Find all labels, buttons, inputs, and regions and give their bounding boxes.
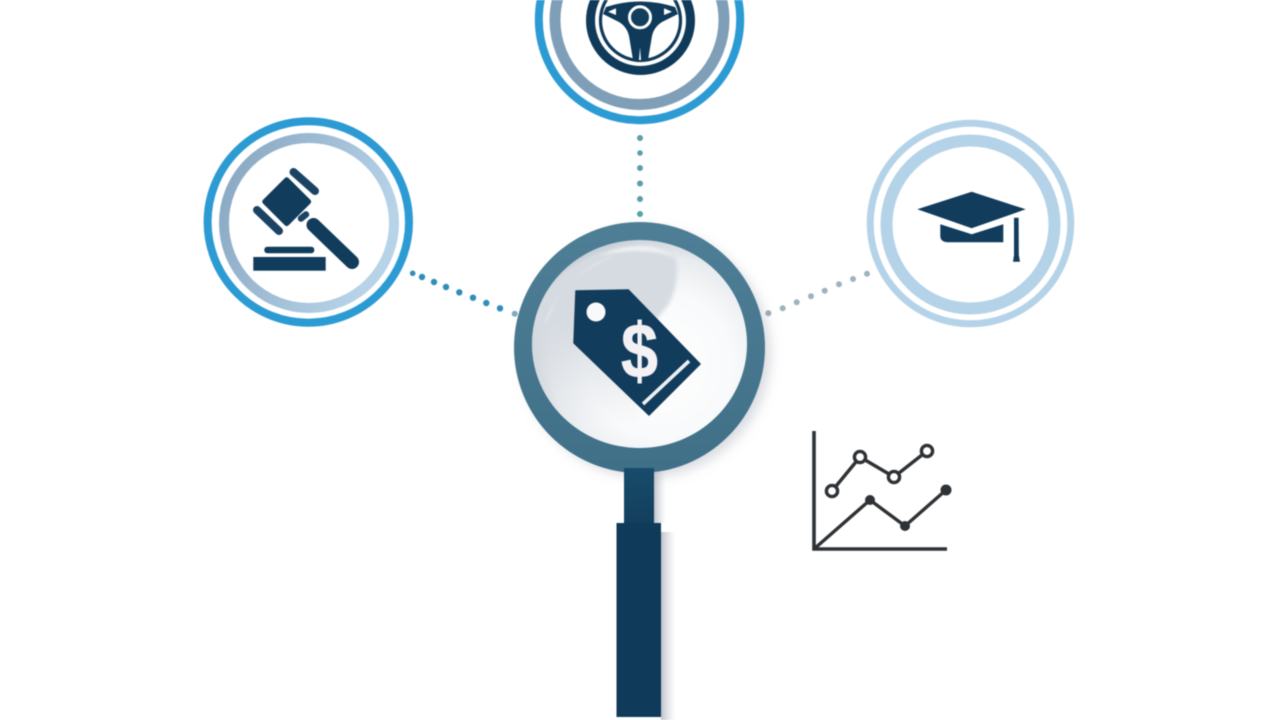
lens drop shadow (522, 229, 770, 477)
axes (814, 431, 947, 549)
left badge: gavel (208, 121, 409, 323)
icon: price tag: $ (621, 308, 658, 395)
left connector dots (410, 270, 518, 317)
lens ring (514, 222, 765, 473)
lower series (814, 484, 952, 549)
icon: price tag (574, 290, 700, 415)
handle shadow (661, 532, 676, 720)
top connector dots (637, 135, 643, 217)
right badge: graduation cap (870, 123, 1071, 324)
icon: gavel (253, 172, 352, 271)
lens reflections (532, 246, 678, 400)
right connector dots (765, 271, 870, 316)
infographic (202, 0, 1075, 720)
magnifying glass (514, 222, 770, 720)
icon: steering wheel (590, 0, 690, 70)
line chart icon (814, 431, 952, 549)
handle neck (624, 468, 654, 524)
icon: graduation cap (917, 192, 1026, 262)
lens glass (532, 240, 747, 448)
top badge: steering wheel (539, 0, 740, 120)
upper series (826, 445, 933, 497)
handle grip (616, 523, 661, 717)
